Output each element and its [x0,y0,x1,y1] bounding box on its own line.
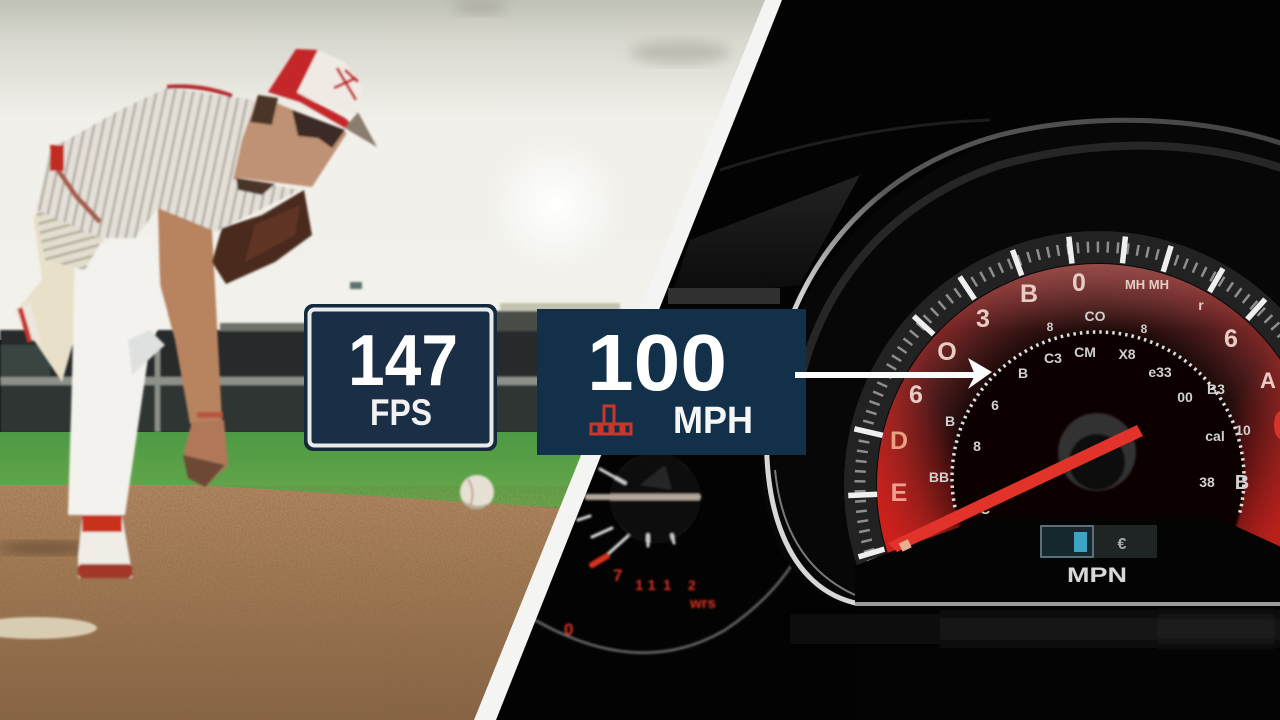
dotted inner ring [952,332,1244,624]
bezel chrome rim [767,120,1280,604]
small gauge needle [585,494,701,500]
outer gauge numerals: 6 [1224,325,1238,353]
small gauge red numerals: 2 [688,577,696,593]
neck and face [233,95,347,187]
grass outfield [0,432,581,508]
outer gauge numerals: 6 [909,381,923,409]
jersey collar trim [167,86,232,96]
outer gauge numerals: r [1198,297,1204,313]
glove [212,190,312,284]
sky [0,0,790,340]
tick ring [860,247,1280,720]
bezel body [762,120,1280,605]
inner gauge numerals: CM [1074,344,1096,360]
digital display: € [1118,536,1127,553]
small gauge ticks [578,469,674,554]
inner gauge numerals: 6 [991,397,999,413]
pants thigh [36,204,101,270]
small gauge red numerals: 1 1 [635,577,656,594]
callout: 100 MPH [537,309,806,455]
back shoe [15,302,42,345]
small gauge red numerals [564,556,716,639]
inner gauge numerals: X8 [1118,346,1136,362]
FPS unit: FPS [370,392,432,433]
callout box [537,309,806,455]
lower dash band [790,614,1280,644]
small gauge red numerals: 0 [564,620,573,639]
inner gauge numerals: C3 [1044,350,1062,366]
foot shadow [0,542,95,554]
inner gauge numerals: B3 [1207,381,1225,397]
black inner dial [952,332,1244,624]
neck shadow [236,178,275,195]
dashboard background [470,0,1280,720]
inner gauge numerals: B [1235,472,1249,494]
bezel inner ring [795,146,1280,410]
inner gauge numerals: e33 [1148,364,1172,380]
dirt texture [0,486,568,654]
inner gauge numerals: 8 [1141,322,1148,336]
baseball [460,475,494,509]
inner gauge numerals: BB [929,469,949,485]
minor ticks [860,247,1280,720]
small gauge red numerals: 1 [663,577,671,594]
outer gauge numerals: 0 [1072,269,1086,297]
small gauge red numerals: wrs [689,595,716,612]
dashboard trim line [720,120,990,170]
pitching arm [158,208,222,424]
dashboard upper panel [674,175,860,288]
main speedometer bezel [762,120,1280,605]
back leg [15,215,105,382]
outer gauge numerals: D [890,427,908,455]
outer gauge numerals: O [937,338,957,366]
sunglasses [292,110,345,148]
small secondary gauge [535,454,795,653]
outer gauge numerals: A [1260,368,1276,393]
gauge centre hub [1058,413,1136,491]
MPH unit: MPH [673,400,753,442]
small gauge red numerals: 7 [613,566,622,585]
dirt infield [0,485,560,720]
red speed icon [591,406,631,434]
pitcher figure [15,49,377,578]
cap [268,49,377,147]
outer gauge numerals: E [891,479,907,507]
small gauge hub [611,454,699,542]
dashboard slat [668,288,780,304]
belt [58,170,100,222]
inner gauge numerals: 38 [1199,474,1215,490]
callout: 147 FPS [304,304,497,451]
jersey [37,88,300,238]
inner gauge numerals: B [1018,365,1028,381]
panel: baseball pitcher photo scene [0,0,790,720]
inner gauge numerals [929,308,1251,517]
standing leg [68,238,168,515]
inner gauge numerals: cal [1205,428,1225,444]
pitching rubber [0,617,97,639]
gauge unit label: MPN [1067,564,1127,587]
inner gauge numerals: C [980,501,990,517]
inner gauge numerals: 00 [1177,389,1193,405]
hand [184,420,228,487]
right edge red marker [1274,411,1280,439]
standing shoe [78,515,132,578]
inner gauge numerals: 10 [1235,422,1251,438]
bezel inner chrome [775,470,855,595]
inner gauge numerals: CO [1084,308,1106,324]
outer gauge numerals: B [1020,280,1038,308]
inner gauge numerals: B [945,413,955,429]
outer gauge numerals [890,269,1276,507]
red needle [888,425,1143,552]
arrow to speedometer [795,358,992,389]
lower black cover [855,518,1280,720]
147 value: 147 [348,321,458,401]
callout frame [304,304,497,451]
bezel bottom chrome [855,602,1280,606]
100 value: 100 [587,318,727,407]
panel: car dashboard scene [534,118,1280,656]
red dial face [877,264,1280,706]
back shoe stripe [20,308,30,342]
white diagonal divider [474,0,782,720]
digital display [1040,525,1157,558]
small gauge rim [535,560,795,653]
wrist band [197,412,223,418]
inner gauge numerals: 8 [973,438,981,454]
major ticks [848,237,1265,557]
stadium stands [0,282,640,434]
outer gauge numerals: MH MH [1125,277,1169,292]
hair [250,95,278,125]
inner gauge numerals: 8 [1047,320,1054,334]
outer gauge numerals: 3 [976,305,990,333]
